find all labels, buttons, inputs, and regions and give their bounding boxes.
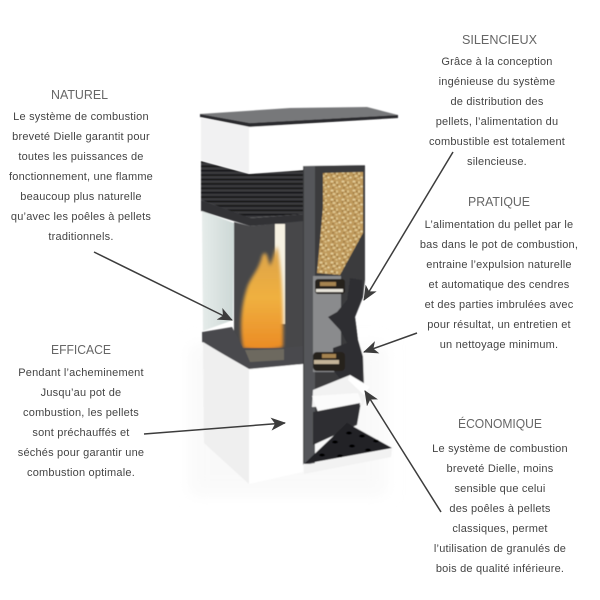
text block: naturel: beaucoup plus naturelle (20, 191, 142, 203)
pellet hopper (317, 172, 363, 275)
mechanism back plate (313, 276, 341, 372)
arrow: naturel to flame (94, 252, 232, 320)
hearth shelf (202, 327, 303, 369)
structural column (304, 166, 315, 464)
text block: pratique: bas dans le pot de combustion, (420, 239, 578, 251)
text block: economique: Le système de combustion (432, 443, 568, 455)
ash chamber (313, 403, 360, 445)
arrow: pratique to auger (364, 333, 417, 352)
text block: silencieux (429, 56, 565, 168)
text block: efficace: combustion optimale. (27, 467, 135, 479)
text block: silencieux: silencieuse. (467, 156, 527, 168)
text block: efficace: Jusqu’au pot de (41, 387, 121, 399)
panel: silencieux (429, 32, 565, 168)
arrow: economique to ash drawer (365, 391, 441, 512)
text block: economique: l’utilisation de granulés de (434, 543, 566, 555)
heading: silencieux: SILENCIEUX (462, 32, 537, 47)
stove illustration (190, 107, 398, 495)
lower white base (203, 342, 303, 484)
text block: naturel: fonctionnement, une flamme (9, 171, 153, 183)
text block: silencieux: ingénieuse du système (439, 76, 555, 88)
text block: naturel: traditionnels. (48, 231, 114, 243)
text block: naturel: qu’avec les poêles à pellets (11, 211, 151, 223)
text block: pratique (420, 219, 578, 351)
soft background halo (190, 345, 386, 495)
text block: economique: breveté Dielle, moins (447, 463, 554, 475)
text block: naturel: toutes les puissances de (18, 151, 144, 163)
firebox frame (234, 221, 304, 366)
lower auger (313, 352, 345, 371)
text block: economique: des poêles à pellets (449, 503, 551, 515)
heading: efficace: EFFICACE (51, 342, 111, 357)
text block: naturel (9, 111, 153, 243)
text block: silencieux: pellets, l’alimentation du (436, 116, 558, 128)
heading: naturel: NATUREL (51, 87, 108, 102)
ventilation grille (201, 161, 304, 226)
text block: pratique: L’alimentation du pellet par le (425, 219, 573, 231)
arrow: silencieux to mechanism (364, 152, 453, 300)
firebox window (275, 224, 285, 324)
feed mechanism (328, 278, 363, 385)
text block: silencieux: Grâce à la conception (441, 56, 553, 68)
flame (241, 246, 283, 350)
top slab (200, 107, 398, 127)
text block: pratique: et automatique des cendres (429, 279, 570, 291)
perforated tray (304, 423, 392, 474)
text block: efficace: séchés pour garantir une (18, 447, 144, 459)
panel: naturel (9, 87, 153, 243)
text block: efficace (18, 367, 144, 479)
text block: economique: sensible que celui (454, 483, 546, 495)
text block: pratique: un nettoyage minimum. (440, 339, 558, 351)
text block: pratique: entraine l’expulsion naturelle (426, 259, 572, 271)
text block: naturel: Le système de combustion (13, 111, 149, 123)
panel: efficace (18, 342, 144, 479)
arrow: efficace to base (144, 423, 285, 434)
text block: pratique: pour résultat, un entretien et (427, 319, 571, 331)
text block: silencieux: combustible est totalement (429, 136, 565, 148)
heading: pratique: PRATIQUE (468, 194, 530, 209)
left glass pane (202, 211, 234, 331)
upper auger (315, 279, 345, 294)
text block: efficace: Pendant l’acheminement (18, 367, 144, 379)
text block: economique: classiques, permet (452, 523, 548, 535)
text block: silencieux: de distribution des (450, 96, 544, 108)
heading: economique: ÉCONOMIQUE (458, 416, 542, 431)
text block: efficace: sont préchauffés et (32, 427, 130, 439)
text block: economique (432, 443, 568, 575)
panel: economique (432, 416, 568, 575)
text block: efficace: combustion, les pellets (23, 407, 139, 419)
text block: economique: bois de qualité inférieure. (436, 563, 564, 575)
internal section back wall (303, 165, 365, 465)
panel: pratique (420, 194, 578, 351)
text block: naturel: breveté Dielle garantit pour (12, 131, 150, 143)
text block: pratique: et des parties imbrulées avec (425, 299, 574, 311)
upper white casing (201, 118, 398, 173)
ash drawer (312, 375, 370, 412)
